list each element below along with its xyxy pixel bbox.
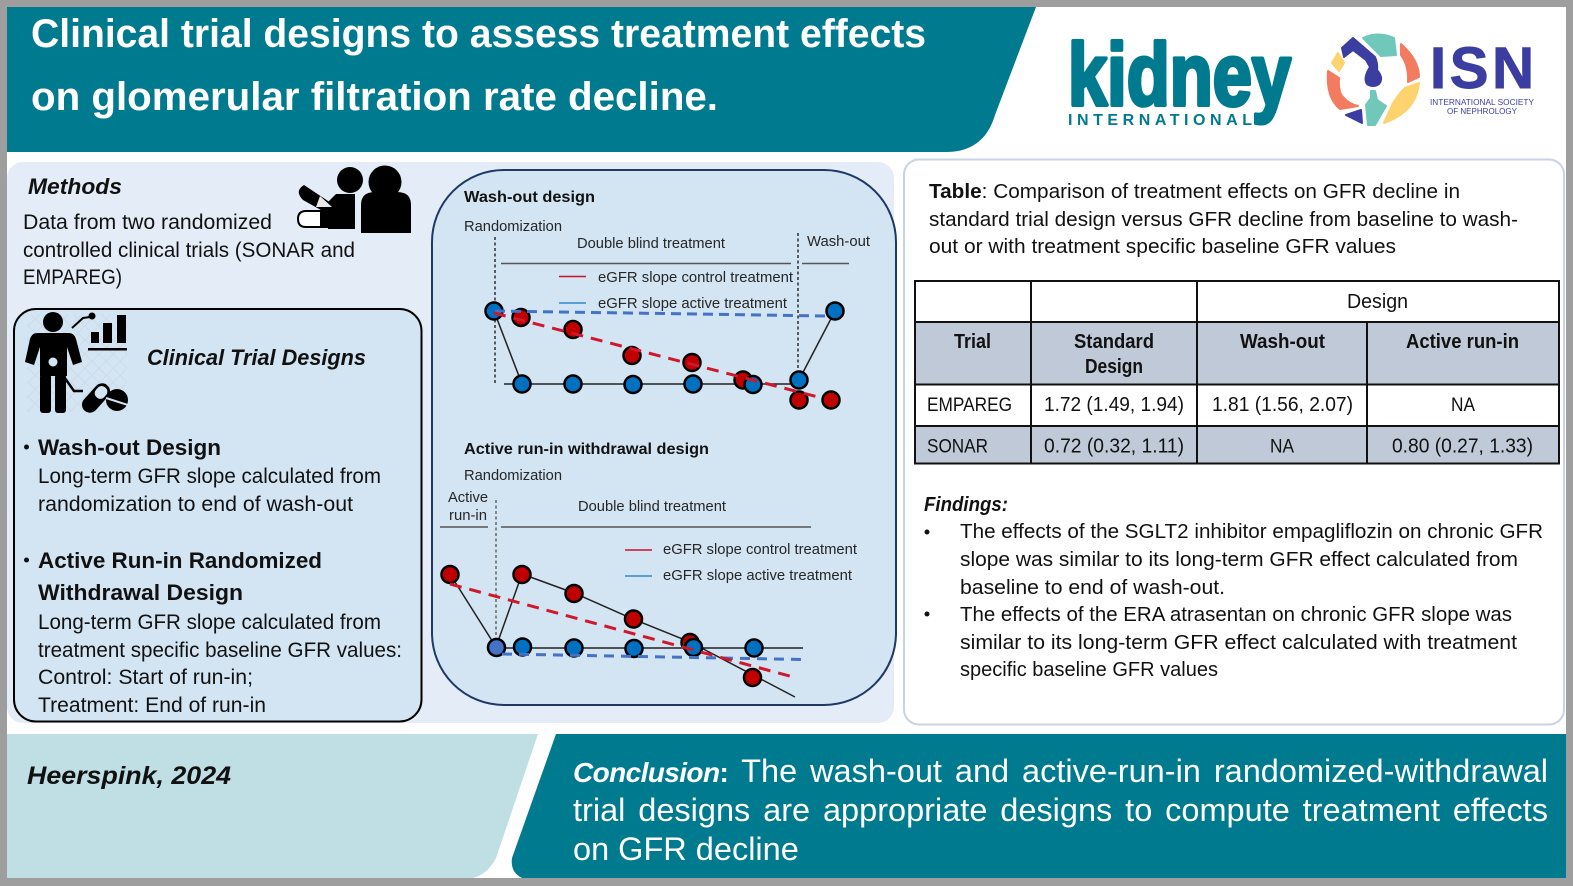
panel: conclusion background xyxy=(512,734,1566,878)
header banner xyxy=(7,7,1036,152)
table: treatment effects comparison: NA xyxy=(1451,394,1475,416)
chart: active run-in withdrawal design: Randomization xyxy=(464,468,562,484)
table: treatment effects comparison: Wash-out xyxy=(1240,330,1325,353)
legend: run-in slopes: eGFR slope control treatment xyxy=(663,542,857,558)
text: conclusion xyxy=(573,753,1548,867)
text: active run-in design: Active Run-in Randomized xyxy=(38,548,322,573)
text: table caption: out or with treatment specific baseline GFR values xyxy=(929,235,1396,258)
icon: patients with pills xyxy=(298,166,411,233)
legend: wash-out slopes: eGFR slope active treatment xyxy=(598,296,787,312)
legend: wash-out slopes: eGFR slope control treatment xyxy=(598,270,793,286)
text: methods description: EMPAREG) xyxy=(23,266,122,289)
title: on glomerular filtration rate decline. xyxy=(31,75,718,119)
text: methods description xyxy=(23,211,355,289)
panel: citation xyxy=(7,734,538,878)
text: active run-in design: treatment specific baseline GFR values: xyxy=(38,639,402,662)
text: conclusion: Conclusion: The wash-out and active-run-in randomized-withdrawal xyxy=(573,753,1548,789)
panel: clinical trial designs xyxy=(14,309,422,722)
text: wash-out design: Long-term GFR slope calculated from xyxy=(38,465,381,488)
text: citation: Heerspink, 2024 xyxy=(27,762,231,790)
text: findings list: baseline to end of wash-out. xyxy=(960,576,1225,599)
legend: wash-out slopes xyxy=(559,270,793,312)
table: treatment effects comparison xyxy=(915,281,1559,464)
heading: clinical trial designs: Clinical Trial Designs xyxy=(147,345,366,370)
logo: ISN wordmark: OF NEPHROLOGY xyxy=(1447,107,1518,116)
text: active run-in design xyxy=(24,548,402,717)
text: table caption: standard trial design versus GFR decline from baseline to wash- xyxy=(929,208,1518,231)
text: findings list: The effects of the SGLT2 inhibitor empagliflozin on chronic GFR xyxy=(960,520,1543,543)
chart: active run-in withdrawal design: Active xyxy=(448,490,488,506)
chart: wash-out design: Wash-out xyxy=(807,234,870,250)
logo: ISN wordmark: INTERNATIONAL SOCIETY xyxy=(1430,98,1535,107)
text: wash-out design xyxy=(24,435,381,516)
table: treatment effects comparison: 0.72 (0.32, 1.11) xyxy=(1044,434,1184,458)
icon: patient and data xyxy=(25,312,128,416)
text: conclusion: trial designs are appropriate designs to compute treatment effects xyxy=(573,792,1548,828)
logo: ISN ring xyxy=(1328,34,1419,125)
heading: findings: Findings: xyxy=(924,494,1008,516)
table: treatment effects comparison: SONAR xyxy=(927,436,988,458)
legend: run-in slopes: eGFR slope active treatment xyxy=(663,568,852,584)
chart: wash-out design xyxy=(464,189,870,408)
text: findings list: slope was similar to its long-term GFR effect calculated from xyxy=(960,548,1518,571)
text: findings list: The effects of the ERA atrasentan on chronic GFR slope was xyxy=(960,603,1512,626)
text: table caption xyxy=(929,180,1518,258)
table: treatment effects comparison: EMPAREG xyxy=(927,394,1012,416)
table: treatment effects comparison: NA xyxy=(1270,436,1294,458)
text: findings list: similar to its long-term GFR effect calculated with treatment xyxy=(960,631,1517,654)
table: treatment effects comparison: 1.72 (1.49, 1.94) xyxy=(1044,393,1184,416)
text: methods description: Data from two randomized xyxy=(23,211,272,234)
text: active run-in design: Control: Start of run-in; xyxy=(38,666,253,689)
heading: wash-out design: Wash-out design xyxy=(464,189,595,206)
text: wash-out design: Wash-out Design xyxy=(38,435,221,460)
table: treatment effects comparison: 1.81 (1.56, 2.07) xyxy=(1212,393,1353,416)
logo: ISN wordmark: ISN xyxy=(1430,36,1534,101)
logo: Kidney International: INTERNATIONAL xyxy=(1068,112,1252,129)
table: treatment effects comparison: Active run-in xyxy=(1406,330,1519,353)
text: active run-in design: Long-term GFR slope calculated from xyxy=(38,611,381,634)
table: treatment effects comparison: Design xyxy=(1085,355,1143,378)
text: findings list: specific baseline GFR values xyxy=(960,658,1218,681)
chart: wash-out design: Randomization xyxy=(464,219,562,235)
panel: trial design diagrams xyxy=(432,170,896,705)
panel: methods background xyxy=(7,162,894,723)
chart: active run-in withdrawal design: run-in xyxy=(449,508,487,524)
text: conclusion: on GFR decline xyxy=(573,831,799,867)
title xyxy=(31,12,926,119)
text: table caption: Table: Comparison of treatment effects on GFR decline in xyxy=(929,180,1460,203)
table: treatment effects comparison: 0.80 (0.27, 1.33) xyxy=(1392,434,1533,458)
panel: table and findings xyxy=(904,160,1564,724)
title: Clinical trial designs to assess treatment effects xyxy=(31,12,926,56)
table: treatment effects comparison: Trial xyxy=(954,330,991,353)
text: active run-in design: Treatment: End of run-in xyxy=(38,694,266,717)
table: treatment effects comparison: Standard xyxy=(1074,330,1154,353)
text: methods description: controlled clinical trials (SONAR and xyxy=(23,239,355,262)
logo: Kidney International: kidney xyxy=(1068,25,1291,124)
text: active run-in design: Withdrawal Design xyxy=(38,580,243,605)
heading: active run-in withdrawal design: Active run-in withdrawal design xyxy=(464,441,709,458)
chart: active run-in withdrawal design xyxy=(440,441,857,697)
table: treatment effects comparison: Design xyxy=(1347,290,1408,313)
legend: run-in slopes xyxy=(625,542,857,584)
chart: active run-in withdrawal design: Double blind treatment xyxy=(578,499,726,515)
text: wash-out design: randomization to end of wash-out xyxy=(38,493,353,516)
text: findings list xyxy=(924,520,1543,681)
chart: wash-out design: Double blind treatment xyxy=(577,236,725,252)
heading: methods: Methods xyxy=(28,174,122,199)
